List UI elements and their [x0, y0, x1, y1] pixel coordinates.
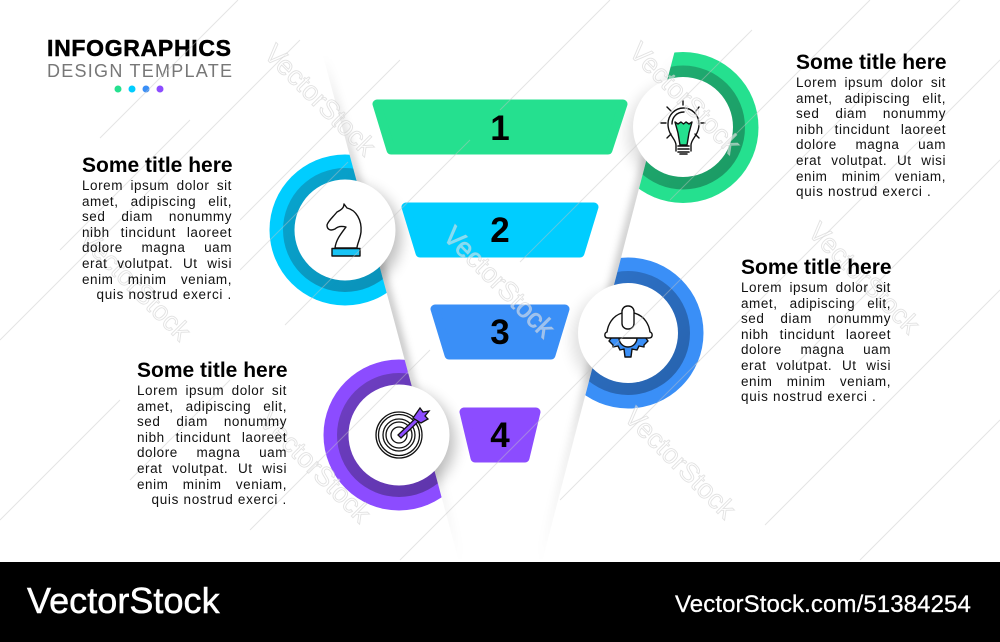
- text: Some title here: [741, 256, 892, 279]
- text block: lower right: Lorem ipsum dolor sit: [741, 280, 891, 295]
- logo dots: [114, 86, 164, 92]
- text block: lower right: erat volutpat. Ut wisi: [741, 358, 891, 373]
- ring: purple: [324, 360, 474, 510]
- watermark text: [73, 36, 926, 529]
- title line 1: INFOGRAPHICS: [47, 35, 231, 61]
- text block: lower right: dolore magna uam: [741, 342, 891, 357]
- trapezoid 2: [406, 207, 594, 253]
- text block: lower left: erat volutpat. Ut wisi: [137, 461, 287, 476]
- text block: lower left: enim minim veniam,: [137, 477, 287, 492]
- icon: light bulb: [661, 101, 705, 154]
- watermark text: VectorStock: [623, 36, 747, 160]
- text block: lower right: [741, 256, 892, 404]
- text block: lower right: amet, adipiscing elit,: [741, 296, 891, 311]
- watermark text: VectorStock: [253, 405, 377, 529]
- text block: lower right: sed diam nonummy: [741, 311, 891, 326]
- text block: upper left: amet, adipiscing elit,: [82, 194, 232, 209]
- icon: chess knight: [327, 204, 361, 256]
- text block: upper left: erat volutpat. Ut wisi: [82, 256, 232, 271]
- watermark text: VectorStock: [802, 216, 926, 340]
- text block: lower left: nibh tincidunt laoreet: [137, 430, 287, 445]
- text block: upper left: dolore magna uam: [82, 240, 232, 255]
- watermark text: VectorStock: [258, 38, 382, 162]
- funnel panel: [330, 52, 674, 498]
- text block: lower left: quis nostrud exerci .: [151, 492, 287, 507]
- icon circle: cyan: [294, 180, 396, 280]
- ring: green: [608, 52, 758, 203]
- trapezoid 1: [377, 104, 623, 150]
- ring: blue: [552, 258, 704, 408]
- text block: top right: [796, 51, 947, 199]
- text: Some title here: [796, 51, 947, 74]
- text block: top right: dolore magna uam: [796, 137, 946, 152]
- text block: upper left: quis nostrud exerci .: [96, 287, 232, 302]
- icon circle: purple: [348, 384, 450, 486]
- footer image id: VectorStock.com/51384254: [675, 591, 971, 618]
- text block: top right: amet, adipiscing elit,: [796, 91, 946, 106]
- text block: upper left: [82, 154, 233, 302]
- text block: top right: quis nostrud exerci .: [796, 184, 932, 199]
- title line 2: DESIGN TEMPLATE: [47, 61, 232, 81]
- footer logo: VectorStock: [27, 580, 220, 621]
- text block: lower left: Lorem ipsum dolor sit: [137, 383, 287, 398]
- text block: lower left: [137, 359, 288, 507]
- text block: upper left: sed diam nonummy: [82, 209, 232, 224]
- text block: top right: enim minim veniam,: [796, 169, 946, 184]
- number 3: 3: [490, 313, 510, 352]
- text block: top right: nibh tincidunt laoreet: [796, 122, 946, 137]
- text block: lower right: quis nostrud exerci .: [741, 389, 877, 404]
- watermark text: VectorStock: [618, 401, 742, 525]
- icon: target with arrow: [376, 408, 429, 458]
- text block: lower left: sed diam nonummy: [137, 414, 287, 429]
- number 4: 4: [490, 416, 510, 455]
- text: Some title here: [137, 359, 288, 382]
- text block: top right: Lorem ipsum dolor sit: [796, 75, 946, 90]
- text block: lower left: amet, adipiscing elit,: [137, 399, 287, 414]
- ring: cyan: [270, 154, 420, 306]
- text block: lower right: enim minim veniam,: [741, 374, 891, 389]
- icon circle: blue: [578, 283, 678, 383]
- text block: lower left: dolore magna uam: [137, 445, 287, 460]
- text block: top right: sed diam nonummy: [796, 106, 946, 121]
- text block: upper left: Lorem ipsum dolor sit: [82, 178, 232, 193]
- text: Some title here: [82, 154, 233, 177]
- trapezoid 3: [435, 309, 565, 355]
- text block: upper left: nibh tincidunt laoreet: [82, 225, 232, 240]
- text block: top right: erat volutpat. Ut wisi: [796, 153, 946, 168]
- footer bar: [0, 562, 1000, 642]
- icon circle: green: [633, 77, 733, 177]
- watermark text: VectorStock: [73, 223, 197, 347]
- text block: upper left: enim minim veniam,: [82, 272, 232, 287]
- number 2: 2: [490, 211, 510, 250]
- watermark text: VectorStock: [437, 220, 561, 344]
- icon: helmet and gear: [605, 306, 652, 357]
- trapezoid 4: [464, 412, 536, 458]
- text block: lower right: nibh tincidunt laoreet: [741, 327, 891, 342]
- number 1: 1: [490, 109, 510, 148]
